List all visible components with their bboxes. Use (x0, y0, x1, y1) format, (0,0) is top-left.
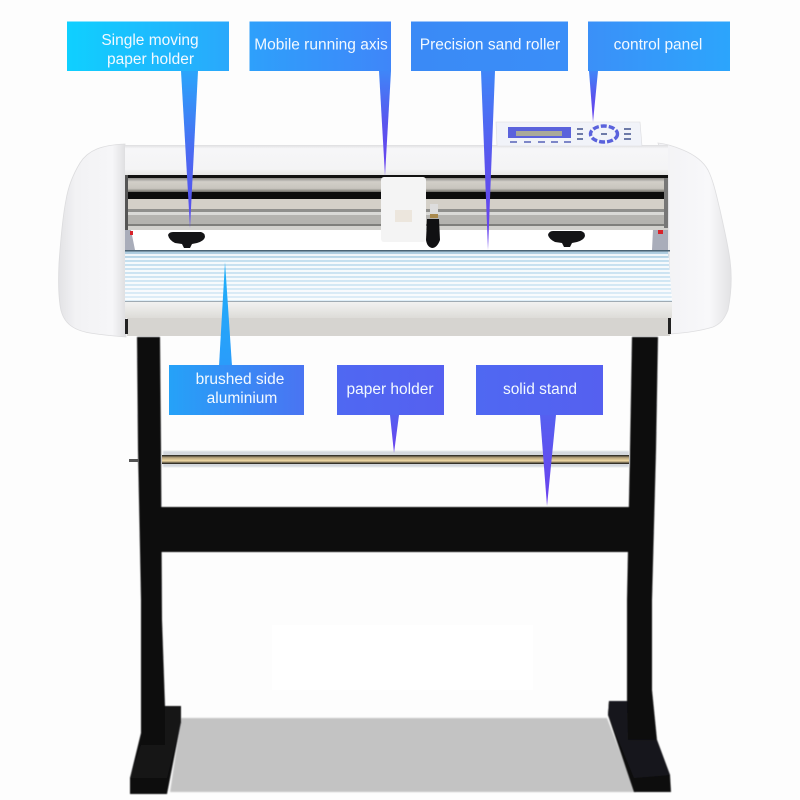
callout: single moving paper holder (67, 22, 229, 228)
floor shadow (170, 718, 636, 792)
pointer (379, 71, 391, 176)
right paper clamp (548, 231, 585, 247)
label box (337, 365, 444, 415)
label box (476, 365, 603, 415)
right foot highlight (608, 701, 670, 778)
pointer (481, 71, 495, 250)
left paper clamp (168, 232, 205, 248)
white strip under rail (130, 230, 652, 250)
label box (169, 365, 304, 415)
sand strip (127, 318, 670, 336)
right leg and foot (608, 337, 671, 792)
callout: control panel (588, 22, 730, 122)
label text: paper holder (346, 381, 434, 398)
cutting plotter machine (59, 122, 731, 794)
label text: control panel (614, 36, 702, 54)
roller (125, 250, 672, 302)
pointer (181, 71, 198, 228)
label box (67, 22, 229, 71)
control panel (496, 122, 642, 146)
callout: precision sand roller (411, 22, 568, 250)
callout: solid stand (476, 365, 603, 506)
callout: paper holder (337, 365, 444, 453)
rail section (125, 175, 668, 230)
pointer (390, 415, 399, 453)
callout: brushed side aluminium (169, 262, 304, 415)
callout: mobile running axis (250, 22, 391, 176)
label box (250, 22, 391, 71)
top cover (125, 145, 668, 175)
pointer (540, 415, 556, 506)
label text: brushed side (196, 371, 284, 388)
right end cap (658, 143, 731, 334)
right bracket (652, 230, 668, 250)
label box (588, 22, 730, 71)
lcd screen (508, 127, 571, 138)
left bracket (125, 230, 135, 252)
blank white patch (272, 625, 533, 690)
label text: Single moving (101, 32, 199, 49)
brushed aluminium bar (125, 302, 672, 318)
crossbar (158, 507, 634, 552)
pointer (589, 71, 598, 122)
label text: Precision sand roller (420, 36, 560, 54)
stand (130, 337, 671, 794)
left end cap (59, 144, 126, 337)
callout: single moving paper holder: paper holder (107, 51, 194, 68)
direction keypad (590, 126, 618, 142)
label text: Mobile running axis (254, 36, 388, 54)
paper holder rod (129, 451, 629, 467)
left leg and foot (130, 337, 181, 794)
callout: brushed side aluminium: aluminium (207, 390, 277, 407)
cutting tool (426, 204, 440, 248)
pointer (219, 262, 232, 366)
label text: solid stand (503, 381, 577, 398)
moving carriage (381, 177, 426, 242)
label box (411, 22, 568, 71)
left foot highlight (130, 706, 181, 778)
